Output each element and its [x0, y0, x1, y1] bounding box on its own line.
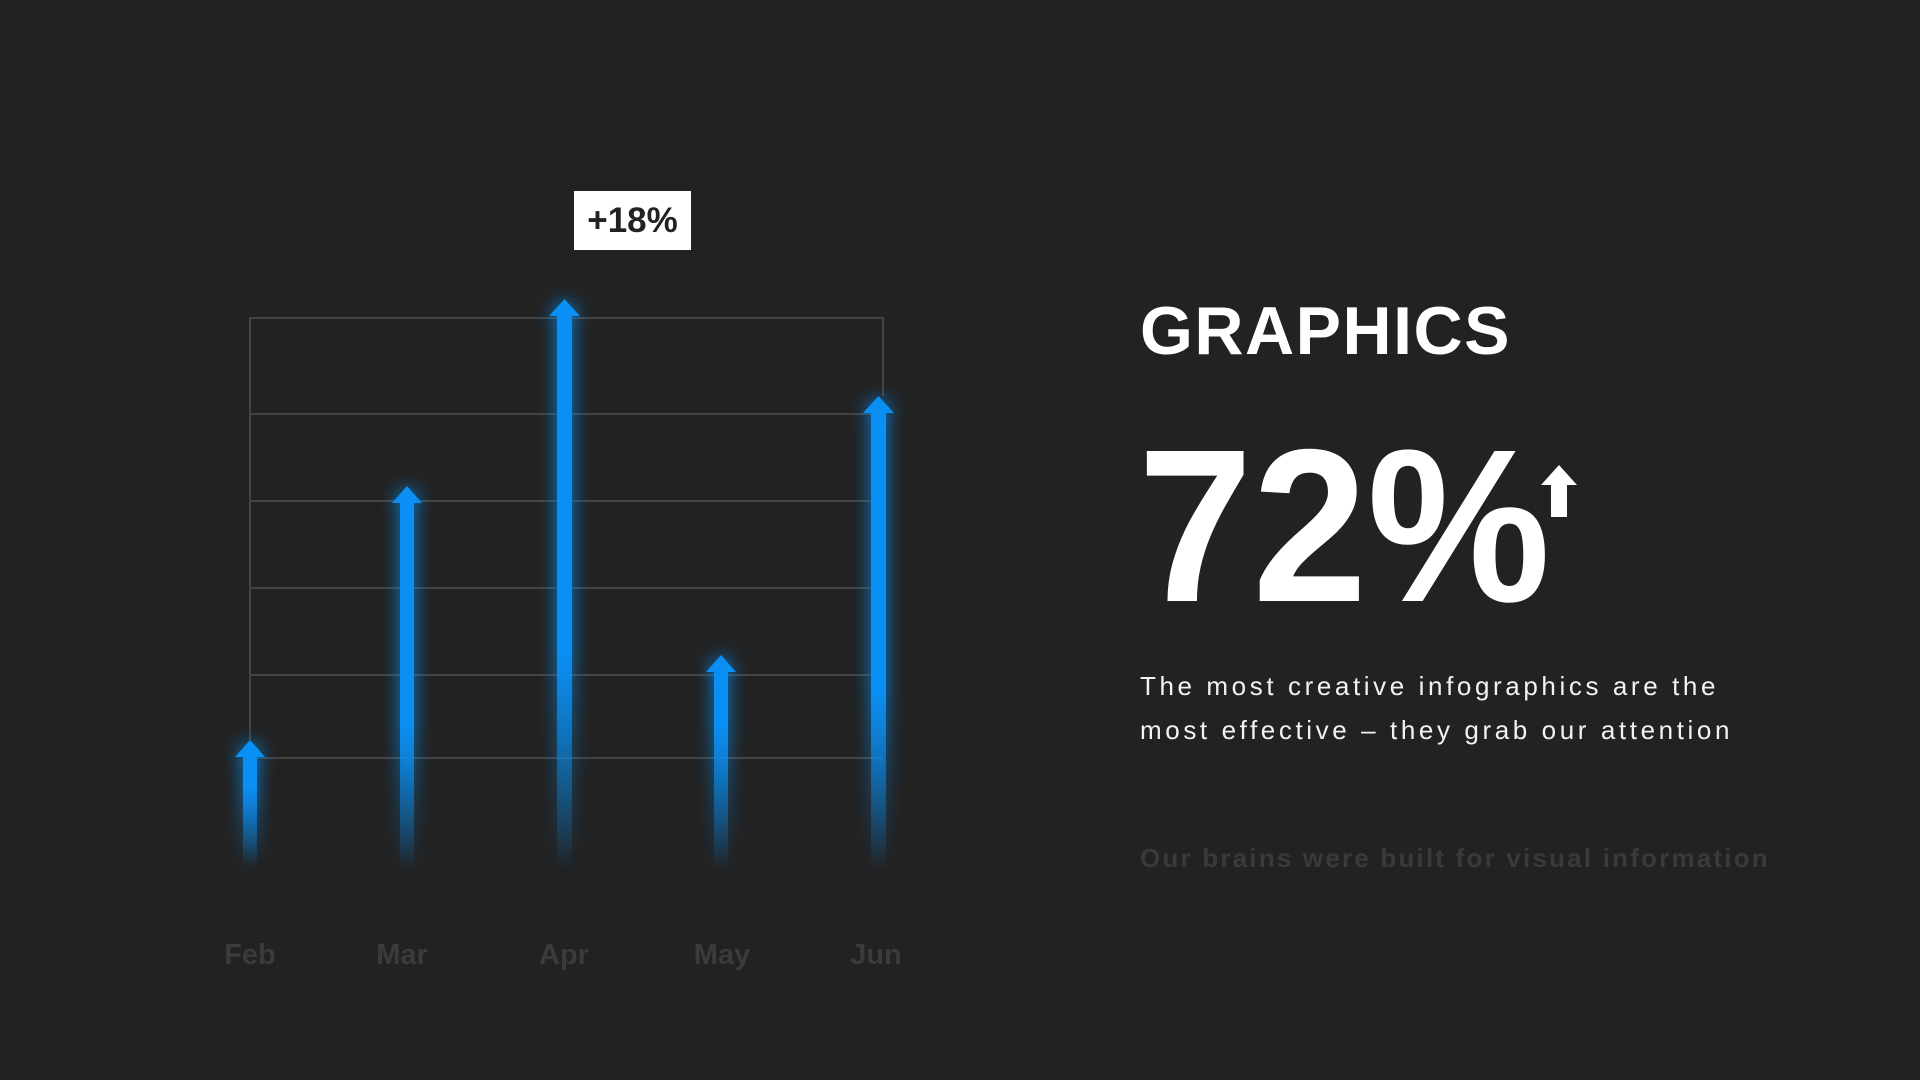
big number: 72%: [1138, 405, 1550, 648]
callout: +18%: +18%: [587, 201, 678, 240]
month labels: Apr: [539, 939, 589, 971]
arrow: Jun: [863, 396, 894, 869]
month labels: Mar: [376, 939, 428, 971]
text block: description: most effective – they grab our attention: [1140, 715, 1733, 745]
callout: +18%: [574, 191, 691, 250]
arrow: Mar: [392, 486, 422, 869]
text block: footer note: Our brains were built for visual information: [1140, 843, 1770, 873]
arrow: May: [706, 655, 736, 869]
month labels: [224, 939, 902, 971]
month labels: Jun: [850, 939, 902, 971]
icon: up arrow: [1541, 465, 1577, 517]
month labels: May: [694, 939, 750, 971]
heading: GRAPHICS: [1140, 293, 1511, 369]
arrow: Apr: [549, 299, 580, 869]
text block: description: [1140, 671, 1733, 745]
arrow: Feb: [235, 740, 265, 867]
text block: description: The most creative infographics are the: [1140, 671, 1719, 701]
chart: monthly arrows: [224, 290, 902, 971]
month labels: Feb: [224, 939, 276, 971]
